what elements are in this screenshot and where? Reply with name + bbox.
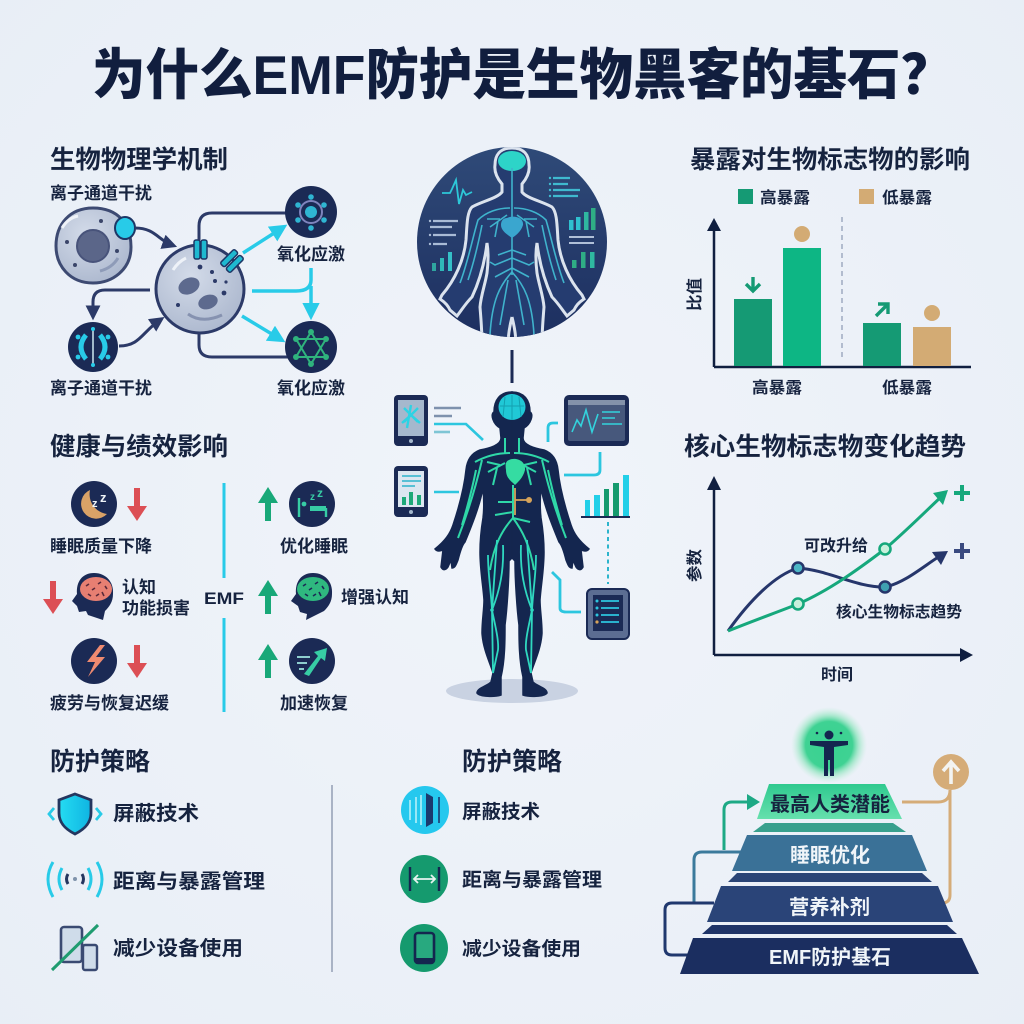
- bar group: [734, 248, 951, 366]
- icon: head with red brain: [72, 573, 113, 620]
- icon: devices crossed: [52, 925, 98, 970]
- label: distance left: 距离与暴露管理: [113, 869, 265, 893]
- heading: protection left: 防护策略: [50, 748, 150, 776]
- icon: shield disc: [401, 786, 449, 834]
- band 3: [702, 925, 957, 934]
- label: fatigue: 疲劳与恢复迟缓: [50, 693, 169, 713]
- connector: teal: [694, 852, 741, 902]
- icon: membrane channel tilted: [220, 249, 244, 273]
- body shadow: [446, 679, 578, 703]
- connector: dashed: [607, 522, 609, 584]
- line green: [728, 496, 942, 631]
- label: cognition impaired: 功能损害: [122, 598, 190, 618]
- icon: resting cell: [56, 208, 135, 283]
- icon: head with green brain: [291, 573, 332, 620]
- icon: moon: z: [92, 498, 98, 510]
- legend: high exposure: 高暴露: [760, 188, 810, 207]
- device: monitor: [564, 395, 629, 446]
- tier: supplements: [707, 886, 953, 922]
- icon: oxidative disc top: [285, 186, 337, 238]
- icon: tan up arrow: [933, 754, 969, 790]
- panel: biomarker bars: [686, 146, 971, 397]
- label: oxidative top: 氧化应激: [277, 244, 345, 264]
- label trend: 核心生物标志趋势: [836, 602, 962, 621]
- icon: wifi: [48, 862, 102, 897]
- arrow: green up recovery: [258, 644, 278, 678]
- device: list tablet: [587, 589, 629, 639]
- connector: tan: [902, 790, 950, 903]
- line navy: [728, 556, 940, 631]
- icon: bed disc: z: [317, 486, 323, 500]
- axis label: 比值: [686, 278, 704, 311]
- markers: [792, 544, 890, 610]
- plus green: [954, 485, 970, 501]
- icon: ion channel disc: [68, 322, 118, 372]
- axes: [714, 484, 964, 655]
- arrow: red down sleep: [127, 488, 147, 521]
- arrow: cell to top disc: [243, 228, 282, 253]
- panel: protection right: [400, 748, 602, 972]
- label: reduce right: 减少设备使用: [462, 938, 581, 960]
- panel: health and performance: [43, 433, 409, 713]
- label: shielding right: 屏蔽技术: [462, 801, 540, 823]
- tier: sleep: [732, 835, 927, 871]
- title: 为什么EMF防护是生物黑客的基石？: [92, 44, 954, 106]
- label: oxidative bottom: 氧化应激: [277, 378, 345, 398]
- connector: cell to bottom disc: [199, 332, 288, 357]
- connector: green arrow: [724, 802, 748, 850]
- panel: biophysical mechanism: [50, 146, 345, 398]
- legend: low exposure: 低暴露: [882, 189, 932, 207]
- arrow: cell to bottom disc: [242, 316, 280, 339]
- arrow heads: [707, 476, 973, 662]
- band 1: [753, 823, 906, 832]
- arrow: green up cognition: [258, 580, 278, 614]
- device: tablet: [394, 466, 428, 517]
- tier: top: [757, 784, 902, 819]
- divider: [841, 217, 843, 360]
- axis label y: 参数: [685, 549, 704, 582]
- heading: exposure: 暴露对生物标志物的影响: [690, 146, 970, 174]
- icon: shield: [49, 794, 101, 834]
- label: foundation: EMF防护基石: [769, 946, 891, 969]
- chart axes: [714, 225, 971, 367]
- label: cognition impaired: 认知: [122, 578, 156, 597]
- icon: membrane channel vertical: [194, 240, 207, 259]
- panel: protection left: [48, 748, 265, 970]
- label: peak: 最高人类潜能: [770, 792, 890, 816]
- heading: biophysics: 生物物理学机制: [50, 146, 228, 174]
- chart: mini bars: [581, 475, 630, 517]
- label low x: 低暴露: [882, 379, 932, 397]
- axis label x: 时间: [821, 666, 853, 684]
- connector: monitor to body: [564, 452, 600, 475]
- legend: high exposure: [738, 188, 810, 207]
- connector: navy: [665, 903, 714, 955]
- arrow: lower left disc to cell: [119, 320, 160, 346]
- label: sleep opt: 睡眠优化: [790, 844, 870, 867]
- markers on bars: [746, 226, 940, 321]
- label: supplements: 营养补剂: [789, 895, 870, 919]
- label: shielding left: 屏蔽技术: [113, 802, 199, 825]
- arrow: green up sleep: [258, 487, 278, 521]
- connector: monitor up: [548, 423, 558, 442]
- connector: list link: [552, 572, 581, 612]
- axis arrow y: [707, 218, 721, 231]
- icon: moon: [71, 481, 117, 527]
- label: distance right: 距离与暴露管理: [462, 868, 602, 891]
- icon: phone disc: [400, 924, 448, 972]
- label: speed recovery: 加速恢复: [280, 693, 348, 713]
- divider: bottom: [331, 785, 333, 972]
- heading: protection right: 防护策略: [462, 748, 562, 776]
- green arrow head: [933, 490, 948, 505]
- device: phone: [394, 395, 428, 446]
- icon: glowing person: [791, 707, 867, 783]
- label: EMF: EMF: [204, 589, 244, 608]
- plus navy: [954, 543, 970, 559]
- icon: recovery disc: [289, 638, 335, 684]
- label: enhance cognition: 增强认知: [341, 588, 409, 607]
- tier: foundation: [680, 938, 979, 974]
- labels x: 高暴露: [752, 378, 802, 397]
- connector line: [510, 350, 514, 383]
- panel: central hologram: [394, 147, 630, 703]
- legend: low exposure: [859, 189, 932, 207]
- panel: pyramid: [665, 707, 979, 974]
- arrow: cell to central cell: [135, 228, 172, 245]
- heading: health: 健康与绩效影响: [50, 433, 228, 461]
- heading: trend: 核心生物标志物变化趋势: [684, 433, 966, 461]
- arrow: cell to lower left disc: [93, 290, 150, 315]
- connector: channel to top disc: [199, 213, 286, 240]
- arrow: merge into bottom disc: [252, 268, 311, 314]
- arrow head: [747, 794, 760, 810]
- arrow: red down cognition: [43, 581, 63, 614]
- label: cognition impaired: [122, 578, 190, 618]
- icon: bed disc: z: [310, 492, 315, 503]
- icon: moon: z: [100, 490, 107, 505]
- lines: phone links: [434, 408, 483, 440]
- icon: oxidative disc bottom: [285, 321, 337, 373]
- band 2: [728, 873, 932, 882]
- body figure: [435, 392, 589, 696]
- icon: bolt: [71, 638, 117, 684]
- disc with figure: [417, 147, 607, 345]
- label: reduce left: 减少设备使用: [113, 937, 243, 960]
- line: tablet link: [434, 491, 459, 493]
- arrow: red down fatigue: [127, 645, 147, 678]
- label: ion channel bottom: 离子通道干扰: [50, 378, 152, 398]
- label: sleep decline: 睡眠质量下降: [50, 536, 152, 556]
- icon: distance disc: [400, 855, 448, 903]
- icon: central cell: [156, 245, 244, 333]
- label improve: 可改升给: [804, 536, 868, 555]
- navy arrow head: [932, 551, 948, 565]
- divider: vertical line: [222, 483, 226, 712]
- icon: bed disc: [289, 481, 335, 527]
- panel: trend chart: [684, 433, 973, 684]
- label: ion channel top: 离子通道干扰: [50, 183, 152, 203]
- label: optimise sleep: 优化睡眠: [280, 536, 348, 556]
